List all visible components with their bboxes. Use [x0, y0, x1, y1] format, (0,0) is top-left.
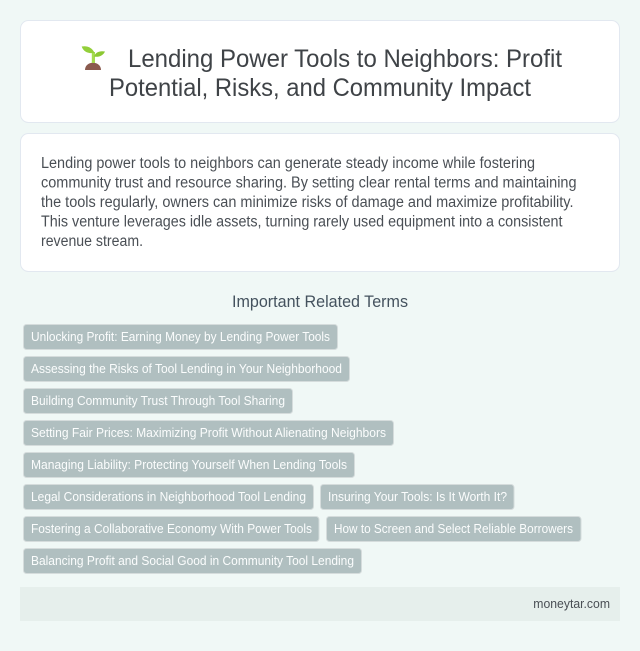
- chip: balancing profit: [24, 548, 362, 574]
- footer: [20, 587, 620, 621]
- chip: screening borrowers: [326, 516, 581, 542]
- chip: assessing risks: Assessing the Risks of Tool Lending in Your Neighborhood: [31, 362, 342, 376]
- heading: related terms: Important Related Terms: [232, 293, 408, 311]
- panel: term chips: [24, 324, 581, 574]
- title: Potential, Risks, and Community Impact: [109, 74, 531, 102]
- panel: summary card: [20, 134, 620, 272]
- text block: summary: [41, 155, 576, 250]
- text block: summary: Lending power tools to neighbors can generate steady income while fostering: [41, 155, 535, 172]
- chip: legal considerations: Legal Considerations in Neighborhood Tool Lending: [31, 490, 306, 504]
- chip: collaborative economy: [24, 516, 319, 542]
- text block: summary: the tools regularly, owners can minimize risks of damage and maximize profitability.: [41, 194, 574, 211]
- chip: unlocking profit: Unlocking Profit: Earning Money by Lending Power Tools: [31, 330, 330, 344]
- chip: legal considerations: [24, 484, 314, 510]
- chip: fair prices: Setting Fair Prices: Maximizing Profit Without Alienating Neighbors: [31, 426, 386, 440]
- chip: building trust: [24, 388, 292, 414]
- footer: moneytar.com: [533, 596, 610, 611]
- text block: summary: revenue stream.: [41, 233, 143, 250]
- chip: building trust: Building Community Trust Through Tool Sharing: [31, 394, 285, 408]
- chip: insuring tools: Insuring Your Tools: Is It Worth It?: [328, 490, 507, 504]
- chip: managing liability: [24, 452, 354, 478]
- chip: fair prices: [24, 420, 394, 446]
- icon: sprout: [82, 46, 105, 70]
- chip: unlocking profit: [24, 324, 338, 350]
- chip: managing liability: Managing Liability: Protecting Yourself When Lending Tools: [31, 458, 347, 472]
- title: Lending Power Tools to Neighbors: Profit: [128, 45, 562, 73]
- title: [109, 45, 562, 102]
- text block: summary: This venture leverages idle assets, turning rarely used equipment into a consistent: [41, 214, 563, 230]
- text block: summary: community trust and resource sharing. By setting clear rental terms and maintaining: [41, 174, 576, 192]
- chip: screening borrowers: How to Screen and Select Reliable Borrowers: [334, 522, 573, 536]
- chip: balancing profit: Balancing Profit and Social Good in Community Tool Lending: [31, 554, 354, 568]
- chip: assessing risks: [24, 356, 350, 382]
- panel: title card: [20, 20, 620, 122]
- chip: collaborative economy: Fostering a Collaborative Economy With Power Tools: [31, 522, 312, 536]
- chip: insuring tools: [320, 484, 514, 510]
